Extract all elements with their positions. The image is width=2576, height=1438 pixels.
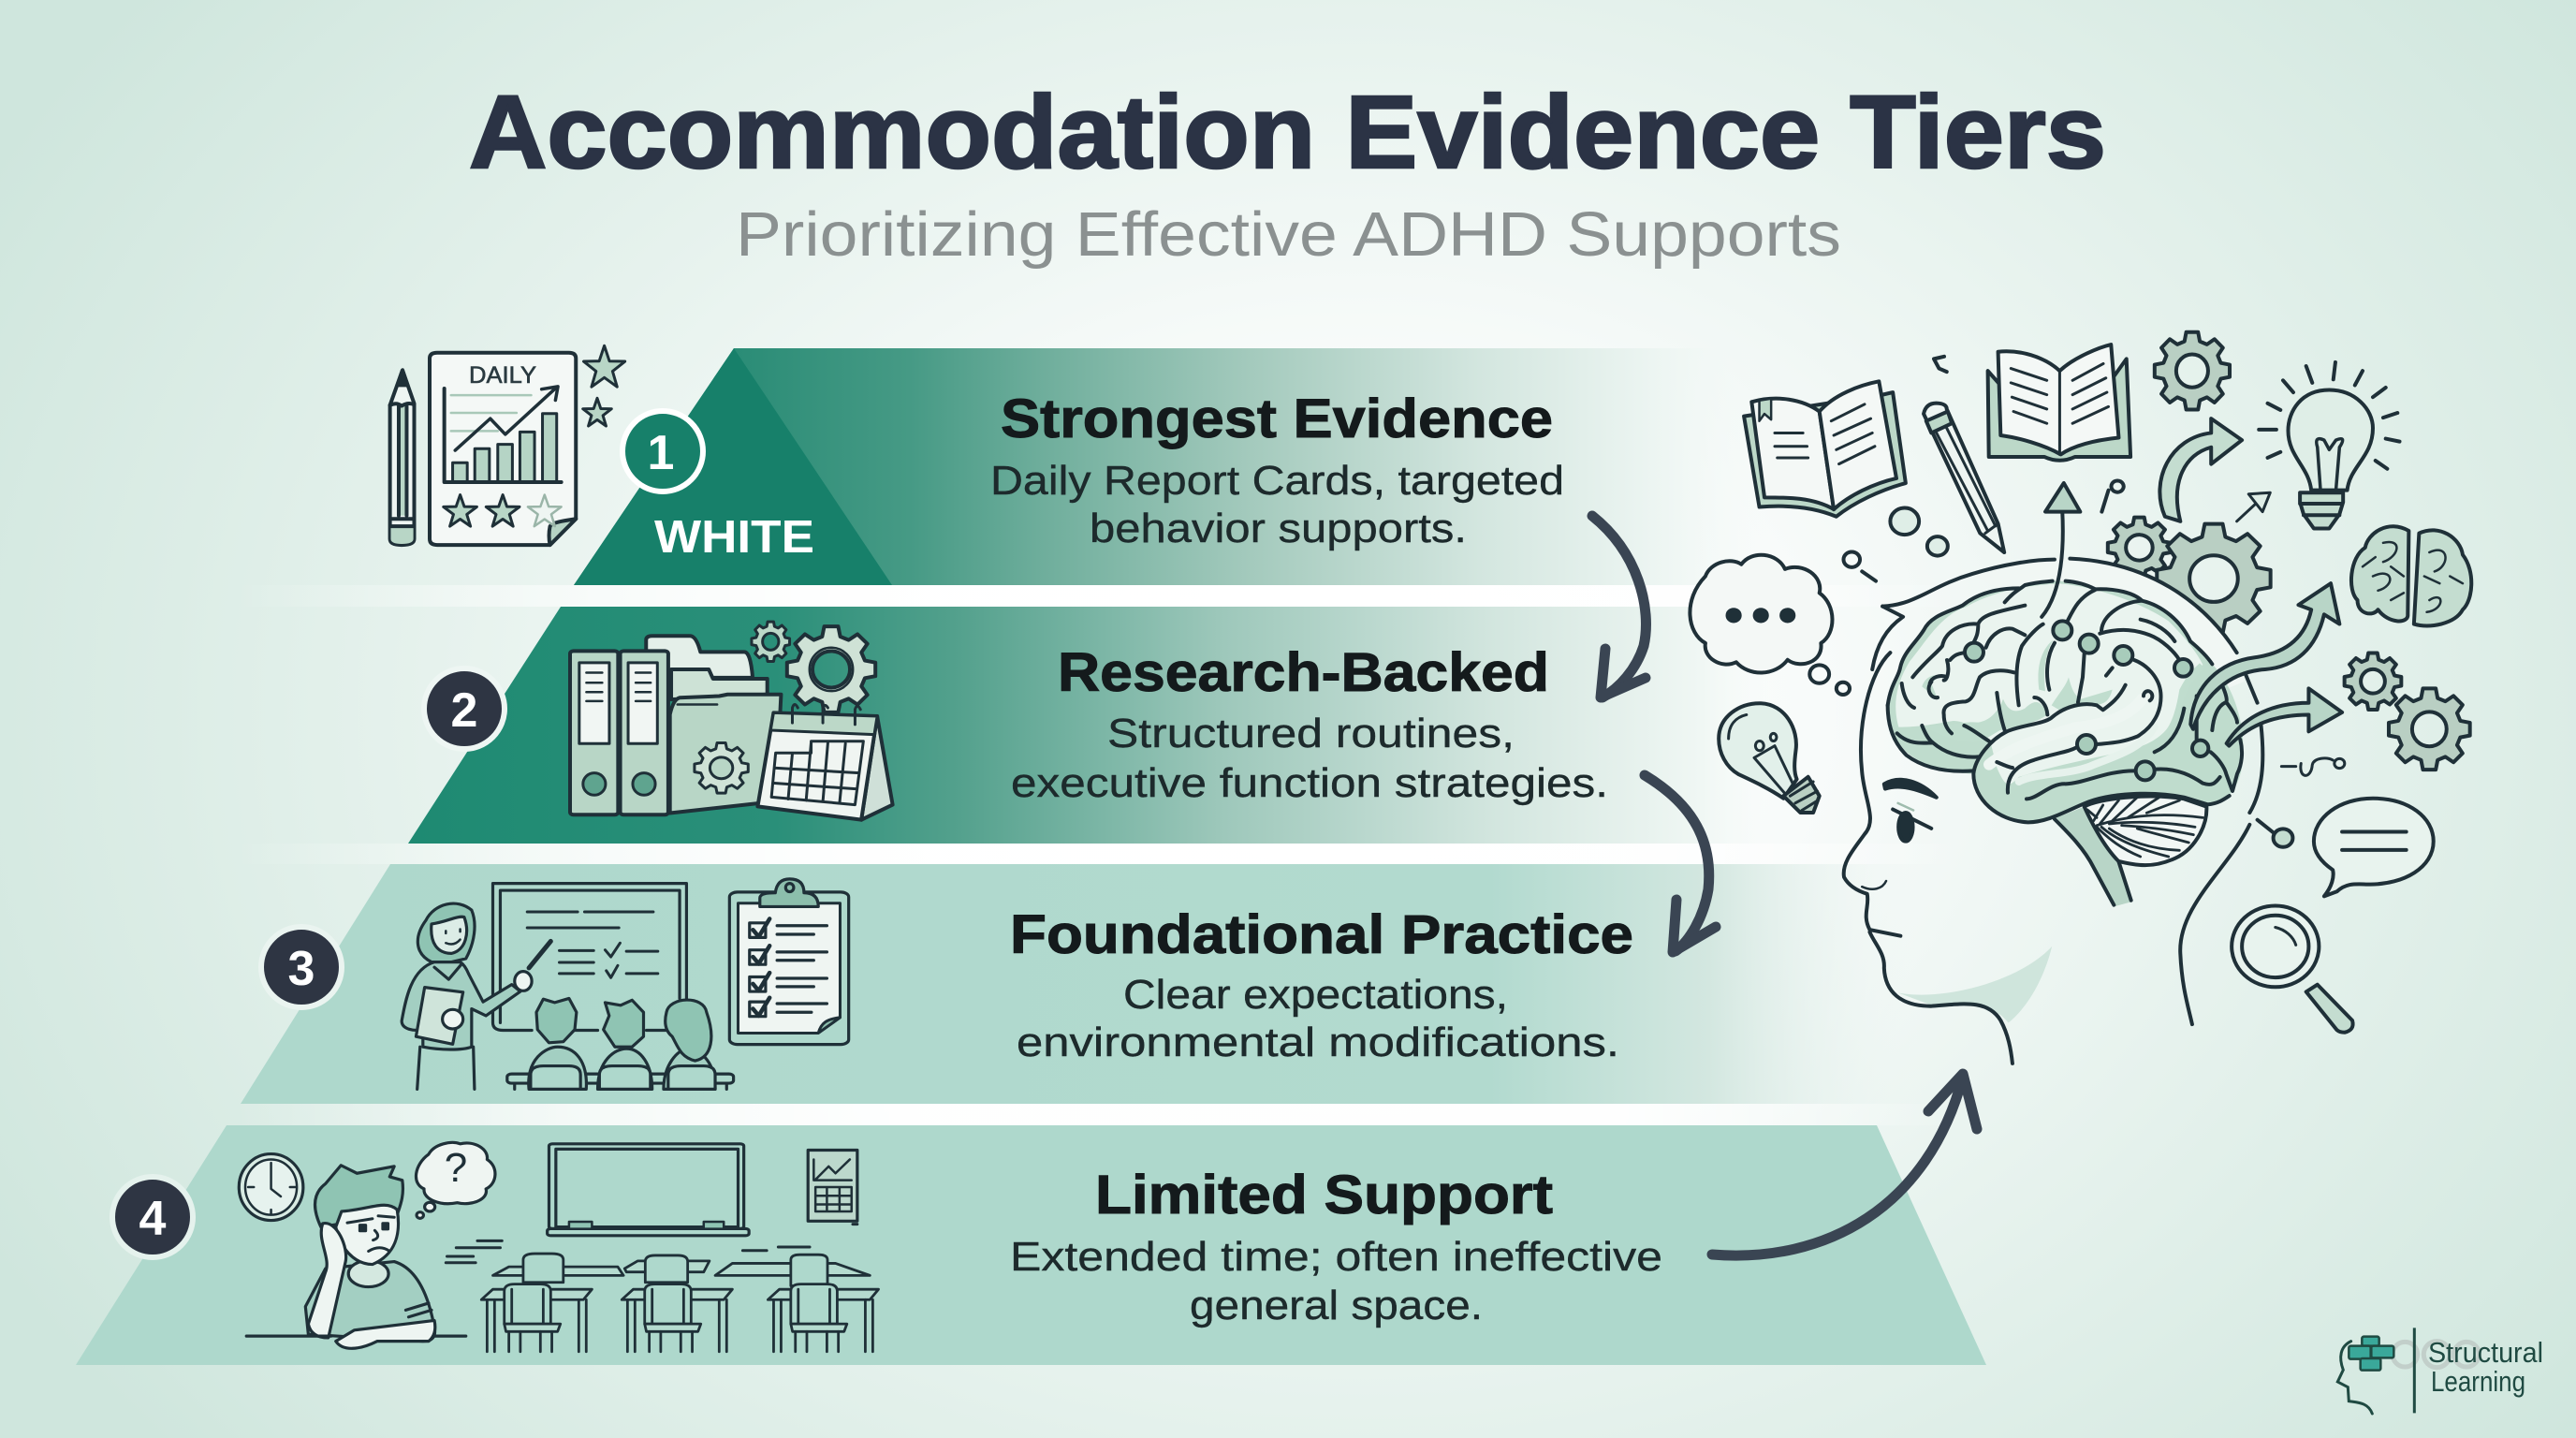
tier 2 description [1011,711,1608,806]
icon: speech bubble [2314,799,2434,896]
temporal lobe highlights [1989,699,2155,782]
logo divider [2413,1328,2416,1413]
tier 1 description [990,458,1564,551]
tier 2 band [408,607,1769,844]
tier 1 description: Daily Report Cards, targeted [990,458,1564,504]
cerebellum [2085,797,2206,865]
arrow: tier 4 to head [1712,1074,1977,1255]
tier 1 number badge [622,411,703,492]
thought bubbles near book [1843,357,2124,581]
icon: daily report card [390,345,625,545]
icon: left lightbulb [1719,703,1820,813]
tier 3: foundational practice [241,864,1928,1104]
icon: small node [2258,758,2345,847]
tier 3 description [1017,972,1619,1065]
icon: mini brain [2351,526,2471,625]
head silhouette and features [1844,559,2262,1064]
tier 1 description: behavior supports. [1090,506,1467,551]
logo wordmark [2428,1336,2543,1398]
brain folds [1888,581,2242,822]
icon: binders, folders, gears and calendar [570,622,893,820]
skull fill hiding gear [1972,559,2245,700]
tier 2 description: Structured routines, [1107,711,1515,756]
head outline [1844,559,2262,1064]
report label: DAILY [469,362,536,389]
tier 2 number badge [424,668,505,749]
brain and head illustration [1690,332,2471,1064]
icon: pencil [1924,404,2004,552]
tier 1 number badge: 1 [648,426,674,480]
neck shading [1898,946,2052,1023]
icon: gears above brain [2108,332,2271,634]
tier 4 description: general space. [1190,1283,1483,1328]
brain stem [2056,807,2131,906]
tier 4 band [76,1125,1986,1365]
tier 1 band [574,348,1769,585]
tier 2 description: executive function strategies. [1011,760,1608,806]
arrow up from brain [2042,483,2080,617]
tier 2: research-backed [408,607,1769,844]
floating icons [1690,345,2471,1033]
icon: gear pair [2345,653,2470,770]
upper cortex highlight [1895,583,2203,785]
icon: teacher at whiteboard with students [402,879,849,1089]
tier 4 description: Extended time; often ineffective [1010,1234,1662,1280]
tier 4 number badge: 4 [139,1192,167,1246]
icon: thought cloud [1690,555,1850,695]
logo [2337,1328,2543,1414]
tier 3 description: Clear expectations, [1123,972,1508,1018]
arrow right upward [2190,583,2339,729]
title: Accommodation Evidence Tiers [469,75,2106,190]
icon: bored student in empty classroom [239,1142,879,1352]
tier 4 description [1010,1234,1662,1328]
brain nodes [1965,621,2208,780]
logo tiles [2349,1337,2393,1371]
brain silhouette [1888,581,2244,821]
tier 4 number badge [112,1177,193,1257]
tier 3 number badge [261,927,342,1007]
tier 3 description: environmental modifications. [1017,1020,1619,1065]
tier 1: strongest evidence [390,345,1769,585]
question mark: ? [445,1145,467,1191]
icon: lightbulb with rays [2259,362,2400,528]
tier 4 heading: Limited Support [1095,1165,1553,1225]
icon: top open book [1988,345,2130,461]
facial features [1884,780,1937,842]
arrow: tier 2 to tier 3 [1645,775,1716,952]
icon: squiggle connector [2281,758,2333,775]
tier 2 heading: Research-Backed [1058,642,1549,703]
tier 3 heading: Foundational Practice [1010,904,1633,965]
arrow: tier 1 to tier 2 [1592,516,1646,697]
icon: curved arrow to bulb [2159,418,2242,521]
tier 4: limited support [76,1125,1986,1365]
subtitle: Prioritizing Effective ADHD Supports [736,199,1841,270]
apex label: WHITE [654,512,814,563]
logo head outline [2337,1342,2372,1414]
tier 1 dark apex [574,348,892,585]
logo wordmark: Structural [2428,1336,2543,1369]
tier 1 heading: Strongest Evidence [1001,389,1553,449]
logo wordmark: Learning [2431,1365,2525,1398]
anatomical brain [1888,581,2244,906]
tier 2 number badge: 2 [451,683,477,738]
cortex shading [1922,639,2204,742]
logo watermark [2393,1342,2479,1368]
tier 3 number badge: 3 [288,942,315,996]
gap glow between tiers [234,585,1966,1125]
tier 3 band [241,864,1928,1104]
icon: left open book [1744,381,1906,517]
icon: magnifying glass [2232,906,2353,1033]
icon: small arrow [2237,492,2270,521]
arrow right [2227,688,2342,746]
